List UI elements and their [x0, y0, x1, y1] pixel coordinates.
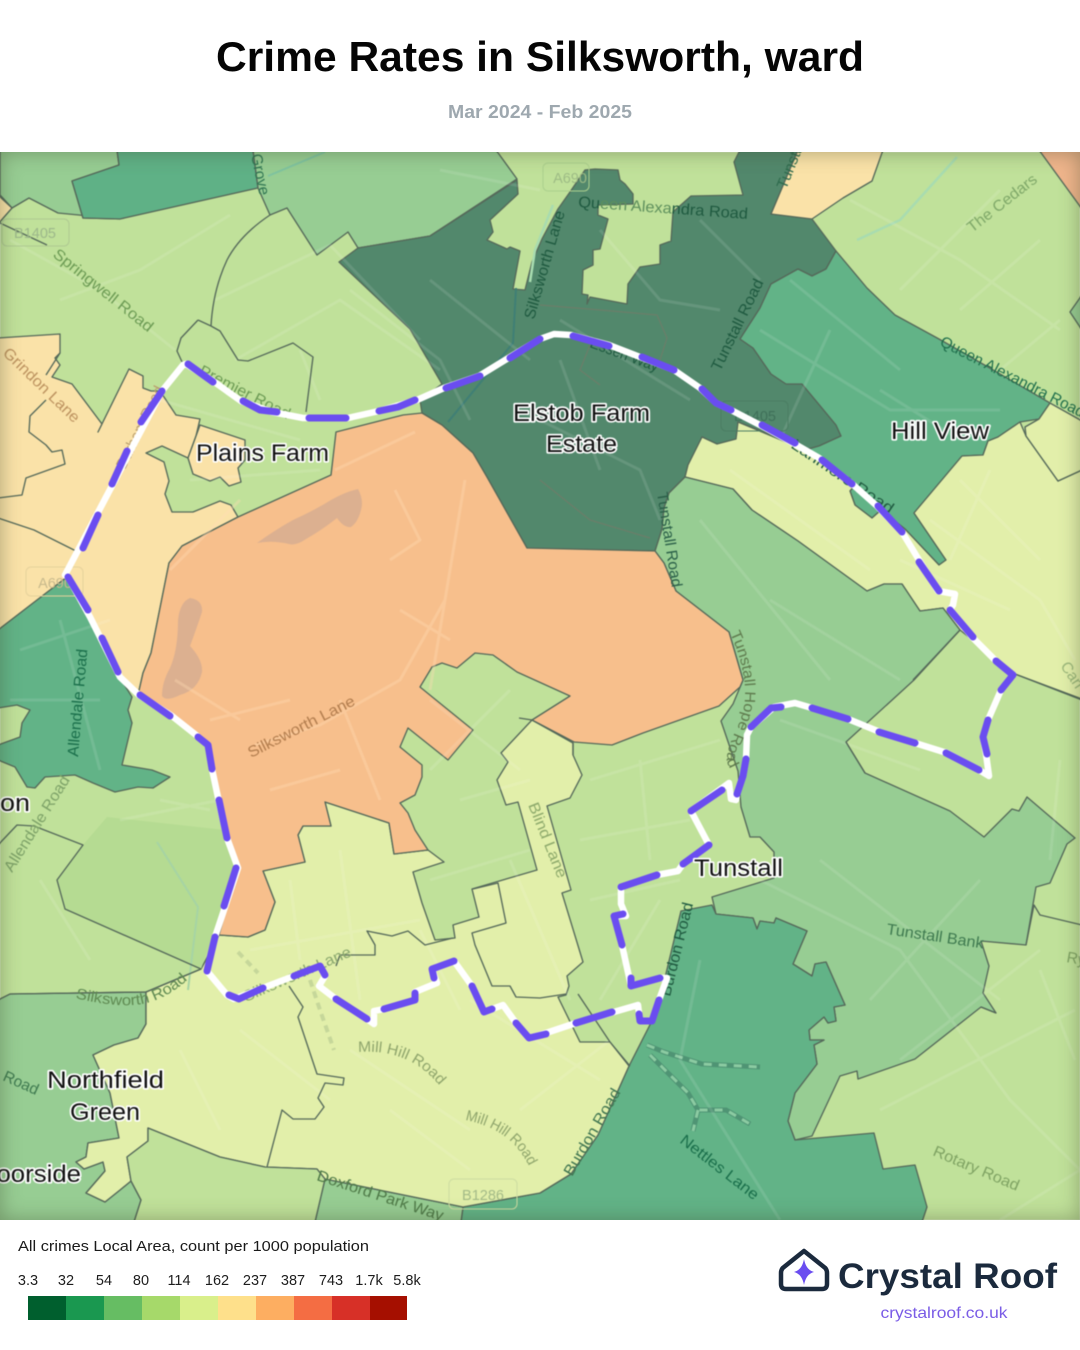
road labels: Springwell Road	[50, 246, 156, 336]
legend scale labels: 54	[96, 1273, 112, 1289]
zone: cream pocket beside Plains Farm	[188, 425, 245, 486]
legend scale labels: 5.8k	[393, 1273, 421, 1289]
place label: clipped left edge on: on	[0, 790, 30, 817]
zone: strong green Allendale	[0, 577, 170, 792]
zone: medium green north-west	[0, 150, 120, 219]
road labels: Durham Road	[113, 383, 168, 472]
road labels: Allendale Road	[65, 648, 91, 757]
road labels: Tunstall Road	[774, 96, 826, 191]
brand url: crystalroof.co.uk	[880, 1305, 1009, 1322]
road network	[10, 170, 1080, 1220]
legend scale labels: 32	[58, 1273, 74, 1289]
road labels: Tunstall Road	[708, 276, 767, 374]
road labels: Queen Alexandra Road	[578, 194, 748, 223]
road labels: Nettles Lane	[677, 1132, 762, 1204]
road labels: Premier Road	[196, 362, 293, 423]
zone: small medium patch far east	[1070, 295, 1080, 330]
ward boundary: white line under purple dashes	[65, 334, 1013, 1038]
zone: pale green south	[76, 720, 629, 1207]
zone: cream Grindon	[0, 334, 238, 695]
zone: orange Silksworth hill	[138, 413, 743, 937]
zone: cream north	[771, 150, 883, 219]
legend scale labels: 1.7k	[355, 1273, 383, 1289]
zone: pale green east	[685, 422, 1080, 699]
road labels: Allendale Road	[1, 773, 74, 875]
road number badges: A690	[553, 171, 587, 187]
ponds on the hill	[162, 489, 362, 699]
place label: Hill View: Hill View	[891, 418, 990, 445]
road labels: Grove	[247, 152, 272, 197]
legend scale labels: 3.3	[18, 1273, 38, 1289]
zone: light green Doxford	[127, 1128, 325, 1222]
legend title: All crimes Local Area, count per 1000 population	[18, 1239, 369, 1255]
road labels: Burdon Road	[657, 901, 697, 998]
road labels: Grindon Lane	[0, 345, 83, 426]
place label: Plains Farm: Plains Farm	[196, 440, 329, 467]
place label: Northfield Green: Northfield	[47, 1067, 164, 1094]
road labels: Silksworth Road	[76, 972, 188, 1006]
road labels: Mill Hill Road	[358, 1040, 448, 1085]
zone: strong green Nettles Lane	[461, 905, 927, 1222]
zone: strong green band	[72, 150, 258, 219]
place label: Elstob Farm Estate	[513, 400, 650, 458]
zone: strong green Hill View	[740, 251, 1050, 565]
legend scale labels: 114	[167, 1273, 191, 1289]
road labels: Silksworth Lane	[245, 693, 358, 762]
subtitle: date range: Mar 2024 - Feb 2025	[448, 101, 632, 122]
place label: Elstob Farm Estate: Estate	[546, 431, 617, 458]
legend colour bar	[28, 1296, 407, 1320]
zone: medium green top centre	[253, 150, 517, 255]
zone: slightly deeper green south-west	[57, 817, 237, 969]
road labels: Mill Hill Road	[466, 1110, 538, 1166]
place label: Tunstall: Tunstall	[694, 855, 783, 882]
road labels: Essen Way	[588, 335, 661, 375]
zone: medium green Tunstall	[655, 477, 1075, 1140]
brand name: Crystal Roof	[838, 1257, 1057, 1296]
road labels: Road	[0, 1068, 41, 1099]
legend scale labels: 387	[281, 1273, 305, 1289]
road labels: Tunstall Hope Road	[726, 629, 756, 768]
icon: Crystal Roof house logo	[781, 1251, 827, 1289]
road number badges: A690	[38, 576, 72, 592]
place label: Elstob Farm Estate: Elstob Farm	[513, 400, 650, 427]
legend scale labels: 743	[319, 1273, 343, 1289]
footpaths in Nettles Lane and Mill Hill	[238, 952, 760, 1131]
zone: dark green Elstob Farm	[339, 150, 841, 551]
streams and water lines	[157, 152, 957, 990]
road number badges: B1286	[462, 1188, 504, 1204]
road labels: Rotary Road	[930, 1143, 1022, 1195]
zone: cream far-left sliver	[0, 195, 12, 224]
road labels: Lanmore Road	[788, 436, 897, 517]
road labels: Blind Lane	[524, 800, 570, 881]
legend scale labels: 237	[243, 1273, 267, 1289]
place label: Northfield Green	[47, 1067, 164, 1126]
zone: medium green Doxford strip	[315, 1179, 463, 1222]
zone: orange corner	[1039, 150, 1080, 209]
road labels: Burdon Road	[561, 1086, 624, 1179]
ward boundary: purple dashes	[68, 336, 1013, 1038]
road number badges: B1405	[734, 409, 776, 425]
legend scale labels: 80	[133, 1273, 149, 1289]
road labels: Tunstall Road	[653, 491, 685, 588]
zone: medium green Northfield Green	[0, 992, 146, 1222]
road labels: Tunstall Bank	[885, 921, 985, 952]
title: Crime Rates in Silksworth, ward	[216, 33, 864, 80]
road labels: Doxford Park Way	[315, 1168, 446, 1225]
legend scale labels: 162	[205, 1273, 229, 1289]
road labels: The Cedars	[964, 171, 1041, 236]
road number badges	[2, 163, 788, 1209]
zone: pale green far north-east	[1025, 403, 1080, 481]
place label: Northfield Green: Green	[70, 1099, 140, 1126]
legend scale labels	[18, 1273, 421, 1289]
road labels: Silksworth Lane	[522, 209, 569, 321]
road number badges: B1405	[14, 226, 56, 242]
extra ward boundary lines	[0, 215, 1080, 1167]
road labels: Silksworth Lane	[241, 944, 354, 1006]
